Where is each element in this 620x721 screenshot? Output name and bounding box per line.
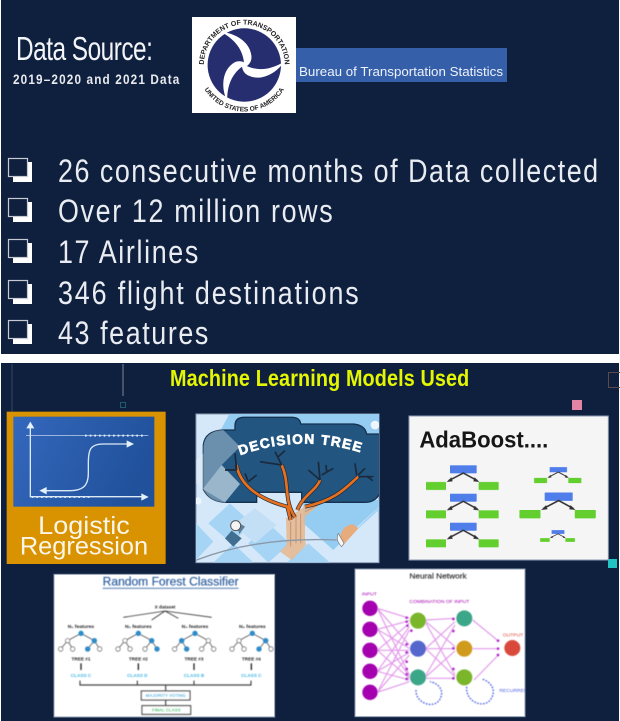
label: logistic regression: Logistic [38, 512, 130, 540]
bullet: months: 26 consecutive months of Data collected [58, 154, 598, 190]
diagram: dataset split: X dataset [155, 605, 176, 610]
diagram: tree 4 [230, 624, 273, 678]
panel: machine learning models [1, 363, 620, 721]
bullet: rows: Over 12 million rows [58, 194, 333, 230]
logo: department of transportation seal [192, 17, 296, 113]
hidden layer 1 [410, 613, 426, 685]
diagram: tree 3: N₃ features [182, 624, 209, 630]
diagram: tree 1: N₁ features [68, 624, 94, 630]
label: decision tree: DECISION TREE [238, 434, 362, 456]
chart: s-curve [26, 422, 149, 501]
output node [504, 640, 520, 656]
figure: left person [225, 521, 245, 547]
tree canopy [203, 417, 382, 502]
sky and diamond pattern [210, 414, 379, 550]
connections [377, 608, 498, 692]
label: combination of input: COMBINATION OF INPUT [409, 599, 469, 605]
decorative frame marks [12, 364, 620, 568]
logo: department of transportation seal: UNITED STATES OF AMERICA [205, 87, 284, 112]
diagram: stumps [426, 465, 596, 547]
bullet: airlines: 17 Airlines [58, 235, 198, 271]
bullet: features: 43 features [58, 316, 208, 352]
diagram: tree 4: TREE #4 [242, 657, 261, 662]
heading: machine learning models used: Machine Learning Models Used [170, 366, 469, 391]
diagram: voting: MAJORITY VOTING [146, 693, 186, 698]
card: decision tree [196, 414, 380, 564]
diagram: tree 3 [172, 624, 216, 678]
bullet: destinations: 346 flight destinations [58, 276, 359, 312]
figure: right person [337, 524, 358, 547]
heading: data source: Data Source: [16, 32, 153, 68]
diagram: tree 2: N₂ features [125, 624, 152, 630]
ground [197, 540, 337, 560]
logo: bureau of transportation statistics [296, 48, 507, 82]
diagram: tree 2 [116, 624, 160, 678]
card: adaboost [409, 416, 608, 560]
diagram: tree 1 [58, 624, 102, 678]
label: neural network: Neural Network [409, 572, 467, 581]
diagram: voting [80, 681, 251, 714]
diagram: tree 4: N₄ features [239, 624, 266, 630]
diagram: tree 3: TREE #3 [185, 657, 204, 662]
label: recurrent node: RECURRENT NODE [499, 688, 547, 694]
arrowhead dots [405, 616, 499, 680]
card: logistic regression: Regression [20, 532, 148, 560]
diagram: tree 3: CLASS B [184, 673, 205, 678]
panel: data source [1, 0, 619, 354]
diagram: tree 2: TREE #2 [129, 657, 148, 662]
bullet list [8, 154, 598, 352]
label: random forest classifier: Random Forest Classifier [103, 575, 239, 589]
recurrent loops [416, 679, 493, 704]
diagram: voting: FINAL CLASS [152, 708, 181, 713]
subheading: years: 2019–2020 and 2021 Data [13, 71, 180, 87]
card: random forest classifier [54, 574, 275, 717]
logo: bureau of transportation statistics: Bureau of Transportation Statistics [299, 65, 503, 79]
branches [237, 465, 358, 520]
label: adaboost: AdaBoost.... [419, 426, 548, 452]
logo: department of transportation seal: DEPARTMENT OF TRANSPORTATION [199, 20, 290, 64]
card: logistic regression [7, 412, 166, 564]
diagram: tree 2: CLASS D [127, 673, 148, 678]
input nodes [362, 601, 378, 700]
diagram: tree 4: CLASS C [241, 673, 262, 678]
label: input: INPUT [362, 591, 377, 597]
diagram: tree 1: CLASS C [71, 673, 92, 678]
card: neural network [354, 568, 526, 718]
tree trunk [280, 505, 319, 560]
label: output: OUTPUT [503, 632, 523, 638]
translucent diamond overlay [203, 430, 240, 502]
hidden layer 2 [456, 610, 472, 685]
diagram: tree 1: TREE #1 [72, 657, 91, 662]
